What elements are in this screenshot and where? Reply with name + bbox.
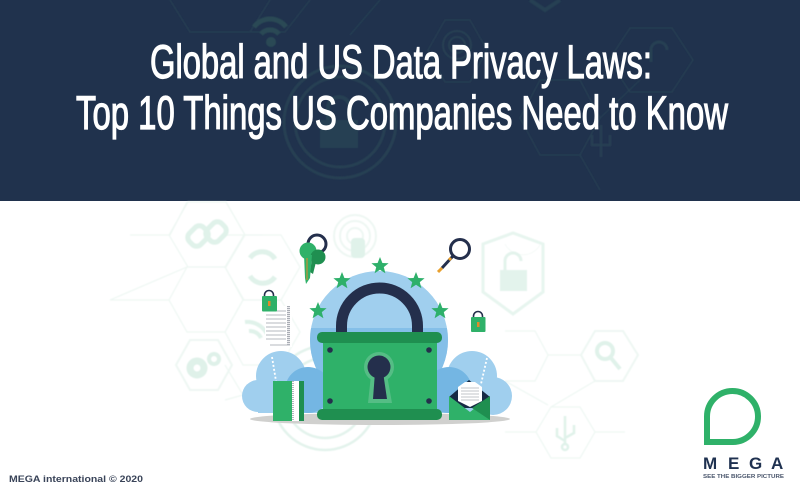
copyright: MEGA international © 2020 (9, 474, 143, 485)
watermark icons (185, 215, 620, 450)
icon: refresh (250, 252, 275, 283)
icon: open padlock (500, 253, 527, 291)
logo tagline: SEE THE BIGGER PICTURE (703, 474, 784, 480)
cloud illustration (242, 271, 512, 425)
icon: document (265, 306, 292, 347)
icon: gears (190, 354, 219, 375)
logo mark (707, 391, 758, 442)
icon: chain link (185, 219, 229, 249)
logo: MEGA (703, 391, 784, 480)
padlock shackle (342, 288, 418, 333)
icon: touch signal (334, 215, 376, 258)
logo wordmark: MEGA (703, 454, 783, 473)
icon: small padlock right (471, 312, 486, 332)
background hexagon network (110, 202, 638, 458)
icon: wifi (245, 322, 267, 338)
icon: envelope (449, 380, 490, 420)
icon: magnifying glass (438, 240, 470, 272)
header banner (0, 0, 800, 201)
header watermark pattern (170, 0, 693, 190)
stars (309, 257, 449, 318)
icon: usb (557, 416, 574, 450)
dotted connectors (272, 357, 487, 384)
icon: notebook (273, 381, 304, 421)
keyhole (364, 352, 394, 403)
icon: keys (300, 235, 326, 284)
icon: small padlock left (262, 290, 277, 312)
main padlock (317, 288, 442, 420)
icon: search (597, 343, 620, 369)
title (76, 35, 729, 139)
